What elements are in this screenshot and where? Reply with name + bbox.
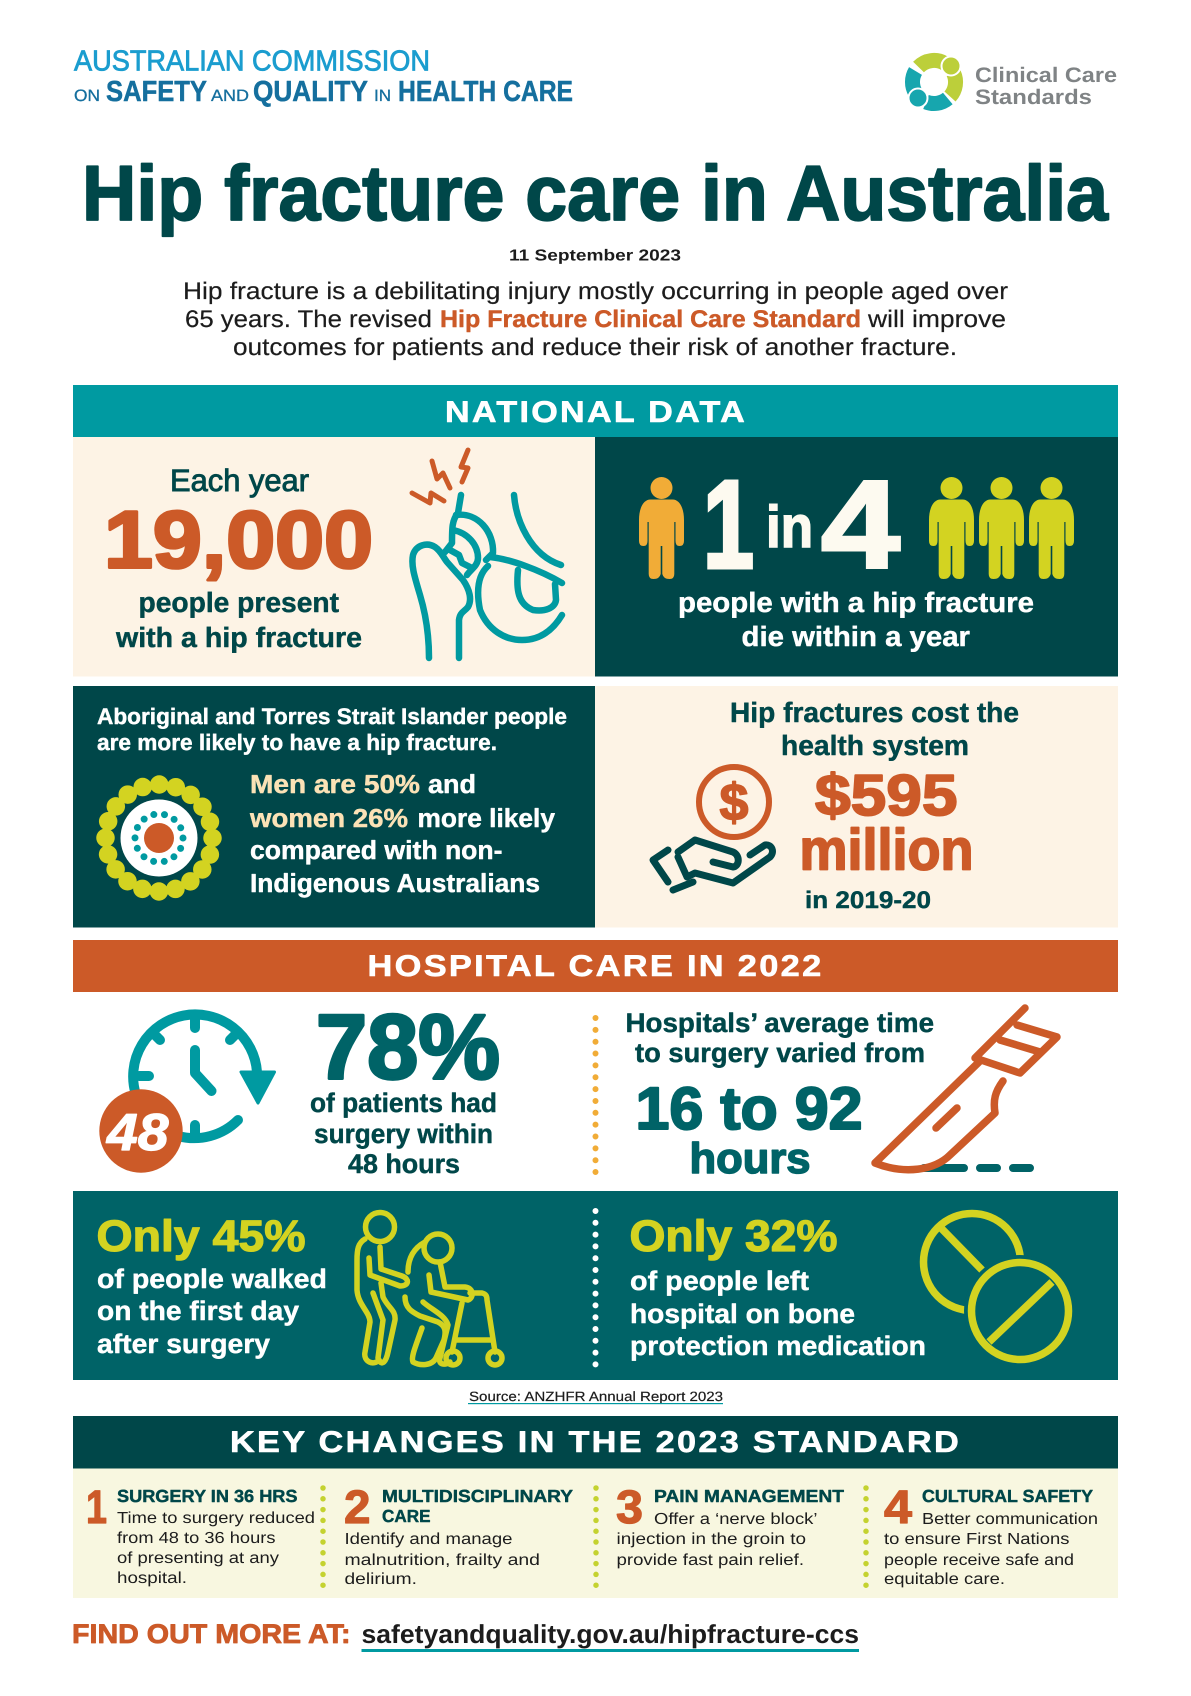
panel: 19,000 people present with a hip fracture — [73, 437, 595, 676]
item 3: pain management: injection in the groin to — [616, 1531, 806, 1548]
heading band: Key changes in the 2023 standard — [73, 1416, 1118, 1468]
panel: time to surgery 16 to 92 hours: 16 to 92 — [636, 1075, 862, 1142]
icon: amber person — [639, 477, 684, 579]
panel: 78% had surgery within 48 hours: 48 hours — [348, 1149, 460, 1179]
icon: hip joint with pain bolts — [412, 450, 562, 658]
stat: only 32% bone medication: protection medication — [630, 1331, 926, 1361]
item 4: cultural safety: people receive safe and — [884, 1552, 1074, 1569]
panel: 78% had surgery within 48 hours: of patients had — [310, 1088, 497, 1118]
heading band: National data: NATIONAL DATA — [445, 396, 747, 429]
icon: hand holding coin: $ — [720, 774, 749, 832]
logo: Clinical Care Standards — [908, 56, 1117, 109]
panel: 78% had surgery within 48 hours — [99, 996, 500, 1179]
logo: Clinical Care Standards: Clinical Care — [975, 64, 1117, 87]
logo: Australian Commission on Safety and Quality in Health Care: HEALTH CARE — [398, 76, 573, 108]
item 2: multidisciplinary care: delirium. — [344, 1571, 417, 1588]
panel: 78% had surgery within 48 hours: surgery within — [314, 1119, 493, 1149]
icon: clock with 48 badge: 48 — [106, 1104, 169, 1162]
text: likelihood comparison: women 26% — [249, 803, 408, 833]
panel: 1 in 4: people with a hip fracture — [678, 587, 1034, 618]
text: likelihood comparison: and — [428, 769, 476, 799]
intro text block: Hip Fracture Clinical Care Standard — [440, 306, 861, 333]
panel: Aboriginal and Torres Strait Islander people: are more likely to have a hip fracture. — [97, 730, 497, 755]
item 1: surgery in 36 hrs: from 48 to 36 hours — [117, 1530, 276, 1547]
heading band: Hospital care in 2022 — [73, 940, 1118, 992]
stat: only 32% bone medication: Only 32% — [630, 1212, 838, 1261]
stat: only 45% walked: Only 45% — [96, 1212, 306, 1261]
title: Hip fracture care in Australia — [82, 149, 1109, 237]
intro text block: Hip fracture is a debilitating injury mostly occurring in people aged over — [183, 278, 1008, 305]
big number: 1 in 4 — [703, 456, 900, 594]
stat: only 32% bone medication — [630, 1212, 926, 1361]
item 3: pain management: PAIN MANAGEMENT — [654, 1486, 844, 1506]
panel: time to surgery 16 to 92 hours: hours — [690, 1135, 810, 1183]
text: likelihood comparison: more likely — [418, 803, 556, 833]
icon: scalpel — [875, 1008, 1057, 1170]
item 2: multidisciplinary care: MULTIDISCIPLINARY — [382, 1486, 573, 1506]
icon: dot painting circle — [106, 784, 212, 892]
intro text block: will improve — [867, 306, 1006, 333]
stat: only 45% walked: on the first day — [97, 1296, 299, 1326]
icon: three lime people — [929, 477, 1074, 579]
item 2: multidisciplinary care: CARE — [382, 1506, 430, 1526]
heading band: Hospital care in 2022: HOSPITAL CARE IN 2022 — [368, 950, 824, 983]
source note: Source: ANZHFR Annual Report 2023 — [469, 1389, 723, 1404]
panel: 78% had surgery within 48 hours: 78% — [316, 996, 500, 1098]
footer: find out more link: FIND OUT MORE AT: — [72, 1619, 350, 1649]
panel: mobilisation and medication band — [73, 1191, 1118, 1380]
stat: only 32% bone medication: of people left — [630, 1266, 809, 1296]
panel: cost to the health system: million — [800, 818, 974, 882]
icon: clock with 48 badge — [99, 1014, 274, 1173]
panel: 19,000 people present with a hip fracture: 19,000 — [104, 496, 373, 586]
item 4: cultural safety: Better communication — [922, 1511, 1098, 1528]
logo: Australian Commission on Safety and Quality in Health Care: QUALITY — [253, 76, 368, 108]
item 1: surgery in 36 hrs: Time to surgery reduced — [117, 1510, 315, 1527]
item 1: surgery in 36 hrs: of presenting at any — [117, 1550, 279, 1567]
icon: hand holding coin — [653, 767, 772, 890]
panel: cost to the health system: Hip fractures cost the — [730, 697, 1019, 728]
logo: Australian Commission on Safety and Quality in Health Care — [74, 46, 573, 108]
stat: only 32% bone medication: hospital on bone — [630, 1299, 855, 1329]
item 2: multidisciplinary care: malnutrition, frailty and — [344, 1552, 540, 1569]
panel: key changes list — [73, 1468, 1118, 1598]
panel: Aboriginal and Torres Strait Islander people: Aboriginal and Torres Strait Islander people — [97, 704, 567, 729]
stat: only 45% walked: of people walked — [97, 1264, 327, 1294]
logo: Australian Commission on Safety and Quality in Health Care: ON — [74, 87, 100, 105]
logo: Clinical Care Standards: Standards — [975, 86, 1092, 109]
date: 11 September 2023 — [509, 248, 681, 264]
item 4: cultural safety: equitable care. — [884, 1571, 1005, 1588]
icon: carer helping person with walker — [357, 1212, 502, 1365]
panel: 1 in 4: die within a year — [742, 621, 970, 652]
item 3: pain management — [616, 1480, 844, 1569]
heading band: National data — [73, 385, 1118, 437]
big number: 1 in 4: 4 — [821, 456, 900, 594]
item 1: surgery in 36 hrs: 1 — [86, 1480, 107, 1533]
logo: Australian Commission on Safety and Quality in Health Care: AUSTRALIAN COMMISSION — [74, 46, 430, 78]
big number: 1 in 4: in — [766, 494, 813, 560]
intro text block: 65 years. The revised — [185, 306, 432, 333]
panel: cost to the health system — [595, 686, 1118, 928]
heading band: Key changes in the 2023 standard: KEY CHANGES IN THE 2023 STANDARD — [230, 1426, 961, 1459]
panel: cost to the health system: health system — [781, 730, 969, 761]
item 4: cultural safety: 4 — [884, 1480, 912, 1533]
item 4: cultural safety: to ensure First Nations — [884, 1531, 1070, 1548]
text: likelihood comparison — [249, 769, 556, 898]
item 3: pain management: Offer a ‘nerve block’ — [654, 1511, 818, 1528]
item 2: multidisciplinary care — [344, 1480, 573, 1588]
stat: only 45% walked — [96, 1212, 327, 1359]
text: likelihood comparison: Men are 50% — [250, 769, 420, 799]
item 1: surgery in 36 hrs — [86, 1480, 315, 1587]
panel: cost to the health system: $595 — [815, 763, 958, 828]
panel: time to surgery 16 to 92 hours — [626, 1008, 1057, 1183]
panel: 1 in 4 — [595, 437, 1118, 676]
text: likelihood comparison: compared with non- — [250, 835, 502, 865]
item 2: multidisciplinary care: 2 — [344, 1480, 370, 1533]
logo: Australian Commission on Safety and Quality in Health Care: AND — [211, 87, 249, 105]
panel: cost to the health system: in 2019-20 — [805, 887, 931, 914]
panel: time to surgery 16 to 92 hours: Hospitals’ average time — [626, 1008, 934, 1038]
footer: find out more link: safetyandquality.gov.au/hipfracture-ccs — [362, 1619, 859, 1649]
icon: ring logo — [908, 56, 960, 108]
intro text block: outcomes for patients and reduce their risk of another fracture. — [233, 334, 957, 361]
text: likelihood comparison: Indigenous Australians — [250, 868, 540, 898]
panel: 19,000 people present with a hip fracture: people present — [138, 587, 339, 618]
item 4: cultural safety — [884, 1480, 1098, 1588]
item 1: surgery in 36 hrs: hospital. — [117, 1570, 187, 1587]
item 2: multidisciplinary care: Identify and manage — [344, 1531, 513, 1548]
item 1: surgery in 36 hrs: SURGERY IN 36 HRS — [117, 1486, 298, 1506]
logo: Australian Commission on Safety and Quality in Health Care: SAFETY — [106, 76, 207, 108]
logo: Australian Commission on Safety and Quality in Health Care: IN — [374, 87, 391, 105]
intro text block — [183, 278, 1008, 361]
panel: 19,000 people present with a hip fracture: with a hip fracture — [115, 622, 362, 653]
big number: 1 in 4: 1 — [703, 456, 754, 594]
panel: time to surgery 16 to 92 hours: to surgery varied from — [635, 1038, 925, 1068]
footer: find out more link — [72, 1619, 859, 1652]
panel: Aboriginal and Torres Strait Islander people — [73, 686, 595, 928]
stat: only 45% walked: after surgery — [97, 1329, 270, 1359]
item 3: pain management: 3 — [616, 1480, 643, 1533]
icon: two pills — [924, 1214, 1072, 1363]
panel: 19,000 people present with a hip fracture: Each year — [170, 463, 309, 498]
item 4: cultural safety: CULTURAL SAFETY — [922, 1486, 1093, 1506]
item 3: pain management: provide fast pain relief. — [616, 1552, 804, 1569]
